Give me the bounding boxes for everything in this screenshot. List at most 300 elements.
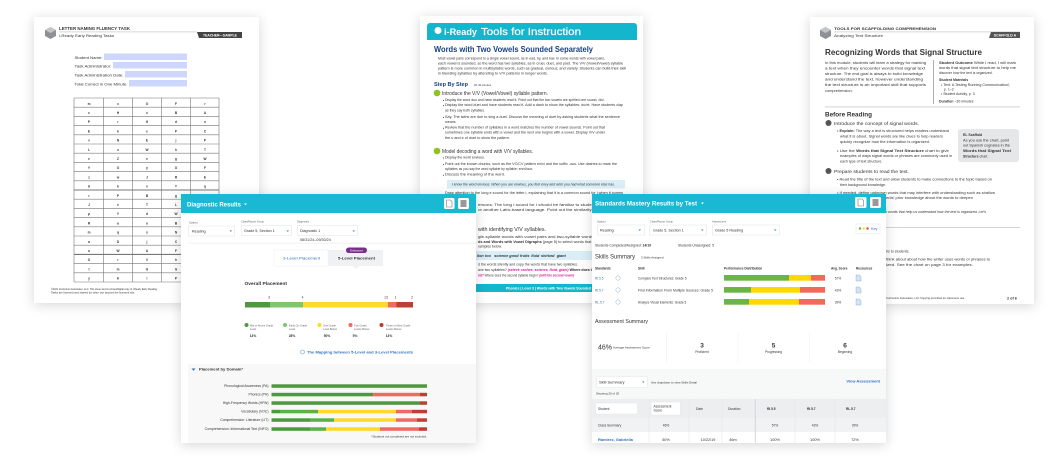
letter grid: p bbox=[88, 212, 90, 216]
during reading text: think about about how the writer uses words or phrases to bbox=[886, 258, 990, 262]
domain labels: Comprehension: Informational Text (INFO) bbox=[205, 427, 268, 431]
legend: Early On Grade bbox=[289, 323, 308, 327]
letter grid: d bbox=[175, 120, 177, 124]
letter grid: e bbox=[88, 157, 90, 161]
step 1: • Explain: The way a text is structured helps readers understand bbox=[837, 129, 949, 133]
word strip: science bbox=[494, 254, 508, 258]
letter grid: m bbox=[117, 268, 120, 272]
letter grid: G bbox=[146, 268, 149, 272]
results table: 39% bbox=[852, 424, 858, 428]
module intro: and understand the text, however understanding bbox=[825, 76, 923, 82]
assessment stats: 6 bbox=[843, 342, 847, 350]
letter grid: m bbox=[88, 230, 91, 234]
heading: step by step: 20–30 minutes bbox=[474, 83, 492, 87]
header bar bbox=[592, 194, 886, 213]
letter grid: O bbox=[117, 166, 120, 170]
explanation text: ersons: The long i sound for i should be familiar to students who read bbox=[478, 203, 618, 207]
placement tabs: Enhanced bbox=[350, 248, 363, 252]
during reading text: hs to students. bbox=[886, 250, 909, 254]
letter grid: r bbox=[117, 120, 119, 124]
step 2: Display the word envious. bbox=[445, 156, 485, 160]
panel: tools for scaffolding comprehension document bbox=[810, 17, 1034, 304]
skills table: Analyze Visual Elements: Grade 5 bbox=[638, 300, 687, 304]
domain bars bbox=[272, 384, 427, 431]
link: mapping between placements: The Mapping between 5-Level and 3-Level Placements bbox=[307, 350, 414, 354]
letter grid: G bbox=[175, 268, 178, 272]
skills table: RI.5.5 bbox=[595, 276, 604, 280]
letter grid: T bbox=[146, 203, 148, 207]
subtitle: Analyzing Text Structure bbox=[834, 34, 883, 38]
heading: tools for scaffolding: TOOLS FOR SCAFFOLDING COMPREHENSION bbox=[834, 26, 936, 31]
assessment stats: Beginning bbox=[838, 350, 852, 354]
module intro: a text when they encounter words that signal text bbox=[825, 66, 926, 70]
letter grid: e bbox=[117, 203, 119, 207]
legend: 28% bbox=[289, 334, 295, 338]
skill summary controls: Use dropdown to view Skills Detail bbox=[651, 380, 697, 384]
results table: Class Summary bbox=[598, 424, 622, 428]
footer strip bbox=[470, 284, 637, 292]
outcome and materials: • Student Activity, p. 3 bbox=[941, 92, 975, 96]
heading: words with two vowels: Words with Two Vowels Sounded Separately bbox=[434, 44, 593, 54]
results table: Date bbox=[696, 407, 703, 411]
step 2 bbox=[434, 148, 617, 177]
letter grid: k bbox=[117, 184, 119, 188]
student form: Task Administrator: bbox=[74, 64, 112, 68]
legend: Mid or Above Grade bbox=[250, 323, 274, 327]
word strip: fluid bbox=[531, 254, 540, 258]
page footer: Curriculum Associates, LLC Copying permitted for classroom use. bbox=[886, 296, 965, 300]
banner: i-Ready tools for instruction: i-Ready bbox=[444, 27, 478, 38]
panel: letter naming fluency task document bbox=[34, 17, 259, 303]
skills table: 39% bbox=[835, 300, 841, 304]
step 2 bbox=[826, 168, 995, 214]
step 1: each type of text structure. bbox=[840, 160, 882, 164]
letter grid: V bbox=[146, 258, 149, 262]
letter grid: Y bbox=[175, 184, 178, 188]
footnote: *Students not completed are not included. bbox=[371, 434, 427, 438]
during reading text bbox=[886, 250, 990, 267]
filters: Diagnostic 1 bbox=[300, 229, 320, 233]
outcome and materials bbox=[939, 61, 1016, 104]
letter grid: h bbox=[175, 258, 177, 262]
heading: overall placement: Overall Placement bbox=[244, 281, 287, 286]
letter grid: q bbox=[117, 230, 119, 234]
outcome and materials: p. 1–2 bbox=[944, 88, 954, 92]
filters: Diagnostic bbox=[297, 220, 310, 224]
filters: Subject bbox=[597, 220, 606, 224]
heading: letter naming task: LETTER NAMING FLUENCY TASK bbox=[59, 26, 130, 31]
heading: skills summary bbox=[595, 254, 664, 260]
letter grid: G bbox=[146, 120, 149, 124]
word strip: giant bbox=[556, 254, 567, 258]
results table: 46% bbox=[663, 424, 669, 428]
letter grid: F bbox=[175, 249, 177, 253]
module intro: In this module, students will learn a strategy for marking bbox=[825, 60, 926, 65]
domain labels: High-Frequency Words (HFW) bbox=[223, 401, 268, 405]
letter grid: H bbox=[117, 111, 120, 115]
filters: Class/Report Group bbox=[241, 220, 264, 224]
letter grid: T bbox=[204, 148, 206, 152]
letter grid: c bbox=[88, 111, 90, 115]
letter grid: z bbox=[88, 176, 90, 180]
skills table: Performance Distribution bbox=[724, 266, 762, 270]
letter grid: O bbox=[88, 258, 91, 262]
letter grid: W bbox=[116, 249, 120, 253]
header bar bbox=[181, 194, 476, 213]
letter grid: q bbox=[204, 184, 206, 188]
intro paragraph: each vowel is sounded, so the word has two syllables, as in cruel, duet, and poet. The V/V (Vowel/Vowel) syllable bbox=[438, 62, 623, 66]
results table: Score bbox=[654, 408, 662, 412]
stacked bar: overall placement: 1 bbox=[395, 296, 397, 300]
step 3 text: xamples below. bbox=[478, 244, 502, 248]
letter grid: j bbox=[146, 240, 148, 244]
footer strip: Phonics | Level 3 | Words with Two Vowels Sounded bbox=[506, 286, 592, 290]
step 2: r words that help us understand how the text is organized. Let's bbox=[886, 210, 986, 214]
letter grid: u bbox=[88, 249, 90, 253]
word strip: lion bbox=[477, 254, 484, 258]
step 2: Discuss the meaning of the word. bbox=[445, 173, 505, 177]
letter grid: B bbox=[146, 194, 149, 198]
header bar: Standards Mastery Results by Test bbox=[595, 200, 697, 208]
filters bbox=[188, 220, 476, 243]
letter grid: P bbox=[175, 276, 178, 280]
legend: 5% bbox=[353, 334, 357, 338]
assessment stats: Proficient bbox=[695, 350, 709, 354]
panel: placement by domain: Placement by Domain* bbox=[199, 366, 243, 372]
callout: envious sentence: I know the word envious. When you are envious, you feel envy and wish you had what someone else has. bbox=[452, 182, 615, 186]
filters: Reading bbox=[600, 228, 614, 232]
letter grid: K bbox=[117, 276, 120, 280]
letter grid: g bbox=[175, 194, 177, 198]
badge: teacher sample: TEACHER—SAMPLE bbox=[203, 34, 238, 38]
legend: 50% bbox=[324, 334, 330, 338]
skills table: 43% bbox=[835, 288, 841, 292]
stacked bar: overall placement: 4 bbox=[302, 296, 304, 300]
domain labels: Vocabulary (VOC) bbox=[241, 410, 268, 414]
letter grid: w bbox=[116, 176, 120, 180]
results table: 10/22/19 bbox=[701, 438, 715, 442]
step 1: Introduce the V/V (Vowel/Vowel) syllable pattern. bbox=[442, 91, 548, 97]
icon: cube bbox=[45, 27, 56, 39]
badge: scaffold A: SCAFFOLD A bbox=[994, 34, 1017, 38]
banner: i-Ready tools for instruction: Tools for Instruction bbox=[481, 27, 581, 38]
skill summary controls bbox=[592, 369, 886, 443]
intro paragraph bbox=[438, 56, 626, 76]
results table: 100% bbox=[810, 438, 820, 442]
domain labels: Comprehension: Literature (LIT) bbox=[220, 418, 268, 422]
letter grid: e bbox=[146, 157, 148, 161]
during reading text: ized. See the chart on page 3 for examples. bbox=[886, 263, 973, 267]
step 1 bbox=[826, 120, 952, 164]
callout: envious sentence bbox=[447, 180, 625, 188]
results table: RL.5.7 bbox=[846, 407, 856, 411]
letter grid: j bbox=[175, 138, 177, 142]
letter grid: d bbox=[146, 212, 148, 216]
copyright note: Tasks are licensed and shared for other use beyond the licensed site. bbox=[51, 292, 135, 294]
letter grid: F bbox=[204, 166, 206, 170]
badge: teacher sample bbox=[197, 32, 242, 38]
letter grid: Z bbox=[117, 157, 119, 161]
step 2: • If needed, define unknown words that may interfere with understanding such as shallow bbox=[837, 191, 995, 195]
heading: skills summary: Skills Summary bbox=[595, 254, 635, 260]
letter grid: x bbox=[146, 111, 148, 115]
word strip bbox=[476, 251, 626, 260]
letter grid: L bbox=[175, 203, 177, 207]
skills table: RI.5.7 bbox=[595, 288, 604, 292]
letter grid: P bbox=[117, 194, 120, 198]
legend: Three or More Grade bbox=[386, 323, 411, 327]
legend: Levels Below bbox=[354, 327, 369, 331]
letter grid: r bbox=[117, 258, 119, 262]
letter grid: t bbox=[88, 268, 90, 272]
step 1: Say, The twins are due to sing a duet. Discuss the meaning of duet by asking students what the sentence bbox=[445, 115, 620, 119]
outcome and materials: discover how the text is organized. bbox=[939, 71, 993, 75]
step 1: Introduce the concept of signal words. bbox=[834, 121, 919, 127]
step 1 bbox=[434, 90, 623, 140]
filters: Reading bbox=[192, 230, 206, 234]
outcome and materials: Student Outcome While I read, I will mark bbox=[939, 61, 1016, 65]
step 2: Prepare students to read the text. bbox=[834, 169, 909, 175]
filters: 08/31/24–09/30/24 bbox=[300, 238, 331, 242]
student counts: Students Unassigned: 5 bbox=[678, 244, 714, 248]
student form bbox=[74, 54, 187, 86]
letter grid: O bbox=[175, 166, 178, 170]
step 1: Display the word duo and have students read it. Point out that the two vowels are spelled one sound, /du/. bbox=[445, 98, 605, 102]
letter grid bbox=[74, 98, 219, 282]
module intro: comprehension. bbox=[825, 88, 853, 93]
copyright note: ©2021 Curriculum Associates, LLC. This sheet and its printed/digital copy of i-Ready Early Reading bbox=[51, 288, 158, 291]
intro paragraph: Most vowel pairs correspond to a single vowel sound, as in ead, by, and tow. In some words with vowel pairs, bbox=[438, 56, 605, 60]
letter grid: W bbox=[203, 157, 207, 161]
callout: EL scaffold bbox=[958, 129, 1019, 162]
skills table: Avg. Score bbox=[831, 266, 848, 270]
letter grid: D bbox=[117, 240, 120, 244]
letter grid: e bbox=[146, 130, 148, 134]
step 2: their background knowledge. bbox=[840, 183, 886, 187]
results table: Ramirez, Gabriella bbox=[598, 437, 634, 442]
letter grid: J bbox=[88, 203, 90, 207]
filters: Grade 5 Reading bbox=[715, 228, 743, 232]
student form: Task Administration Date: bbox=[74, 74, 124, 78]
stacked bar: overall placement: 13 bbox=[384, 296, 388, 300]
callout: EL scaffold: EL Scaffold bbox=[963, 133, 982, 137]
intro paragraph: pattern is more common in multisyllabic words, such as gradual, curious, and variety. Students can build their skill bbox=[438, 66, 626, 70]
filters bbox=[597, 220, 880, 235]
letter grid: C bbox=[175, 240, 178, 244]
letter grid: o bbox=[146, 222, 148, 226]
results table: 57% bbox=[772, 424, 778, 428]
results table: Assessment bbox=[654, 404, 672, 408]
letter grid: Y bbox=[117, 212, 120, 216]
page footer: 2 of 6 bbox=[1007, 296, 1017, 300]
module intro: the text structure is an important skill that supports bbox=[825, 82, 926, 87]
stacked bar: overall placement bbox=[245, 296, 413, 308]
legend: Two Grade bbox=[354, 323, 367, 327]
filters: Grade 5, Section 1 bbox=[653, 228, 684, 232]
placement tabs: 3-Level Placement bbox=[283, 256, 320, 260]
step 1: sometimes one syllable ends with a vowel and the next one begins with a vowel. Display V/V under bbox=[445, 131, 606, 135]
placement tabs: 5-Level Placement bbox=[338, 256, 376, 260]
step 2: syllables as you say the word syllable by syllable: en/vi/ous. bbox=[445, 167, 533, 171]
outcome and materials: • Text: A Testing Running Communication!, bbox=[941, 83, 1010, 87]
letter grid: P bbox=[88, 120, 91, 124]
filters: Key bbox=[871, 227, 878, 231]
letter grid: W bbox=[145, 148, 149, 152]
module intro: structure. The end goal is always to build knowledge bbox=[825, 71, 923, 76]
filters: Subject bbox=[189, 220, 198, 224]
letter grid: a bbox=[88, 240, 90, 244]
module intro bbox=[825, 60, 926, 93]
filters: Assessment bbox=[712, 220, 726, 224]
letter grid: O bbox=[146, 102, 149, 106]
domain labels bbox=[205, 384, 268, 431]
panel: tools for instruction document bbox=[420, 16, 643, 303]
heading: step by step bbox=[434, 82, 492, 88]
outcome and materials: Student Materials bbox=[939, 78, 968, 82]
student counts bbox=[595, 244, 714, 248]
domain labels: Phonological Awareness (PA) bbox=[224, 384, 268, 388]
icon: cube bbox=[820, 27, 831, 39]
step 2: ents' prior knowledge about the words to deepen bbox=[886, 196, 973, 200]
domain labels: Phonics (PH) bbox=[249, 392, 268, 396]
letter grid: C bbox=[204, 130, 207, 134]
panel: diagnostic results dashboard bbox=[181, 194, 476, 443]
skill summary controls: View Assessment bbox=[846, 378, 881, 384]
results table: 100% bbox=[770, 438, 780, 442]
page footer bbox=[886, 296, 1017, 300]
callout: EL scaffold: Words that Signal Text bbox=[963, 149, 1012, 153]
letter grid: W bbox=[174, 212, 178, 216]
letter grid: N bbox=[175, 230, 178, 234]
stacked bar: overall placement: 2 bbox=[411, 296, 413, 300]
results table: 46m bbox=[729, 438, 737, 442]
explanation text: Draw attention to the long e sound for the letter i, explaining that it is a common sound for i when it comes bbox=[445, 191, 623, 195]
intro paragraph: in blending syllables by attending to V/V patterns in longer words. bbox=[438, 72, 548, 76]
assessment stats: Progressing bbox=[765, 350, 782, 354]
student counts: Students Completed/Assigned: 14/19 bbox=[595, 244, 651, 248]
step 3 text: gle-syllable words with vowel pairs and two-syllable words with V/V syl bbox=[478, 235, 618, 239]
student form: Student Name: bbox=[74, 56, 103, 60]
title: Recognizing Words that Signal Structure bbox=[825, 48, 983, 57]
letter grid: E bbox=[88, 130, 90, 134]
letter grid: R bbox=[175, 176, 178, 180]
skills table bbox=[595, 266, 873, 305]
skills table: Find Information From Multiple Sources: Grade 5 bbox=[638, 288, 713, 292]
heading: step by step: Step By Step bbox=[434, 82, 469, 88]
assessment stats: 5 bbox=[772, 342, 776, 350]
results table bbox=[592, 399, 886, 443]
results table: 72% bbox=[851, 438, 859, 442]
letter grid: U bbox=[88, 184, 91, 188]
assessment stats: 3 bbox=[700, 342, 704, 350]
letter grid: v bbox=[88, 138, 90, 142]
legend: Levels Below bbox=[386, 327, 401, 331]
letter grid: x bbox=[117, 148, 119, 152]
letter grid: E bbox=[146, 138, 148, 142]
step 1: what it is about. Signal words are like clues to help readers bbox=[840, 134, 943, 138]
assessment stats bbox=[598, 333, 852, 362]
legend: 14% bbox=[386, 334, 392, 338]
word strip: good bbox=[508, 254, 519, 258]
letter grid: r bbox=[88, 194, 90, 198]
practice questions: d the words silently and copy the words that have two syllables. bbox=[478, 262, 578, 266]
letter grid: A bbox=[146, 249, 149, 253]
results table: Duration bbox=[728, 407, 741, 411]
practice questions bbox=[478, 262, 596, 278]
results table: 43% bbox=[812, 424, 818, 428]
letter grid: P bbox=[204, 138, 207, 142]
explanation text: or another Latin-based language. Point out the similarity using other l bbox=[478, 208, 618, 212]
step 3 heading: with identifying V/V syllables. bbox=[478, 227, 546, 233]
letter grid: P bbox=[175, 130, 178, 134]
legend bbox=[244, 323, 411, 338]
letter grid: k bbox=[117, 130, 119, 134]
letter grid: c bbox=[117, 102, 119, 106]
letter grid: y bbox=[146, 166, 148, 170]
placement tabs bbox=[274, 248, 383, 269]
header bar: Diagnostic Results bbox=[187, 202, 242, 208]
word strip: fruits bbox=[520, 254, 530, 258]
letter grid: g bbox=[175, 157, 177, 161]
step 1: the u and e of duet to show the pattern. bbox=[445, 136, 510, 140]
skill summary controls: Skill Summary bbox=[599, 380, 625, 384]
assessment stats: 46% bbox=[598, 344, 612, 352]
letter grid: B bbox=[175, 222, 178, 226]
step 1: • Use the Words that Signal Text Structure chart to give bbox=[837, 149, 949, 153]
skills table: Resources bbox=[856, 266, 873, 270]
badge: scaffold A bbox=[989, 32, 1020, 38]
practice questions: ave two syllables? (select: rachee, science, fluid, giant) Where does the bbox=[478, 268, 596, 272]
letter grid: J bbox=[146, 176, 148, 180]
letter grid: v bbox=[146, 184, 148, 188]
step 1: quickly recognize how the information is organized. bbox=[840, 140, 930, 144]
filters: Class/Report Group bbox=[650, 220, 673, 224]
step 3 text: ds and Words with Vowel Digraphs (page 5) to select words that are bbox=[478, 240, 598, 244]
legend: Level bbox=[289, 327, 296, 331]
results table: Student bbox=[598, 407, 609, 411]
legend: One Grade bbox=[323, 323, 336, 327]
legend: 14% bbox=[250, 334, 256, 338]
letter grid: B bbox=[175, 111, 178, 115]
outcome and materials: words that signal text structure to help me bbox=[939, 66, 1016, 70]
legend: Level bbox=[250, 327, 257, 331]
step 2: Model decoding a word with V/V syllables. bbox=[442, 149, 533, 155]
step 3 text bbox=[478, 235, 618, 248]
letter grid: n bbox=[204, 120, 206, 124]
skills table: RL.5.7 bbox=[595, 300, 605, 304]
skills table: Compare Text Structures: Grade 5 bbox=[638, 276, 687, 280]
callout: EL scaffold: Structure chart. bbox=[963, 154, 988, 158]
banner: i-Ready tools for instruction bbox=[427, 23, 637, 40]
letter grid: E bbox=[204, 176, 206, 180]
skills table: Skill bbox=[638, 266, 645, 270]
skills table: 57% bbox=[835, 276, 841, 280]
results table: 50% bbox=[662, 438, 670, 442]
heading: skills summary: 3 Skills Assigned bbox=[641, 256, 664, 260]
results table: RI.5.5 bbox=[767, 407, 776, 411]
panel: placement by domain bbox=[188, 364, 476, 443]
heading: before reading: Before Reading bbox=[825, 112, 872, 118]
letter grid: A bbox=[204, 111, 207, 115]
filters: Grade 5, Section 1 bbox=[244, 229, 275, 233]
step 2: Point out the known chunks, such as the VC/CV pattern en/vi and the suffix -ous. Use dashes to mark the bbox=[445, 162, 617, 166]
letter grid: m bbox=[88, 102, 91, 106]
skills table: Standards bbox=[595, 266, 611, 270]
letter grid: L bbox=[88, 148, 90, 152]
letter grid: h bbox=[175, 148, 177, 152]
letter grid: r bbox=[204, 102, 206, 106]
callout: EL scaffold: out Spanish cognates in the bbox=[963, 144, 1010, 148]
